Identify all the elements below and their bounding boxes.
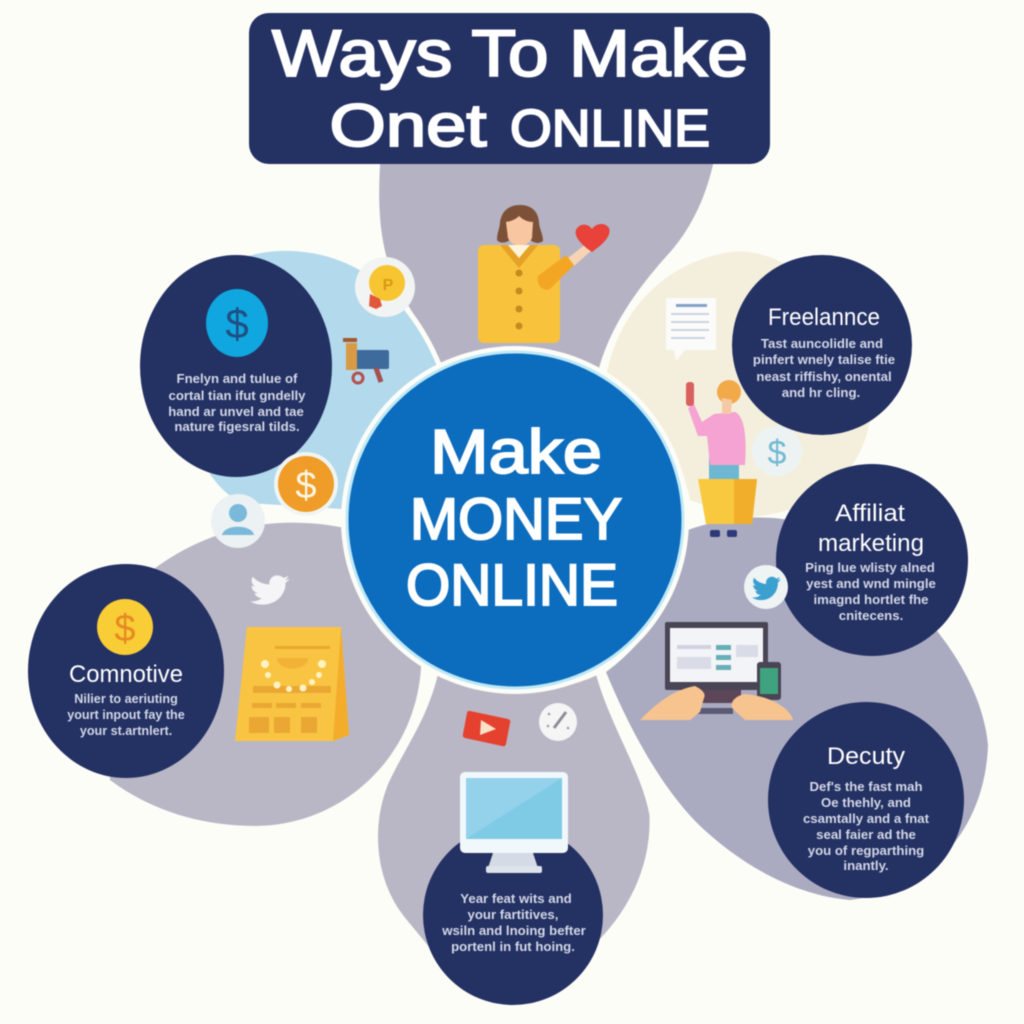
panel: top petal <box>379 150 716 372</box>
panel: Decuty circle <box>768 702 964 898</box>
panel: Affiliate marketing circle: cnitecens. <box>839 608 903 623</box>
icon: woman with heart <box>478 205 610 343</box>
panel: bottom circle: portenl in fut hoing. <box>451 939 575 954</box>
panel: blue dollar circle <box>140 255 332 477</box>
icon: person with shopping bag <box>686 380 757 537</box>
icon: twitter badge <box>744 565 788 609</box>
icon: small cart <box>343 338 389 383</box>
body text: Fnelyn and tulue of <box>177 371 298 386</box>
body text <box>168 371 306 434</box>
icon: cyan dollar coin <box>206 289 268 357</box>
panel: bottom circle: wsiln and lnoing befter <box>441 923 586 938</box>
title banner: ONLINE <box>510 100 710 158</box>
body text: hand ar unvel and tae <box>168 404 304 419</box>
panel: Freelance circle: pinfert wnely talise ftie <box>753 352 895 367</box>
panel: Freelance circle: Freelannce <box>768 304 880 331</box>
panel: Decuty circle: seal faier ad the <box>816 827 916 842</box>
panel: left gray petal <box>100 523 421 826</box>
icon: dollar badge <box>752 426 802 476</box>
panel: Affiliate marketing circle: imagnd hortlet fhe <box>813 592 929 607</box>
panel: bottom circle <box>423 825 603 1005</box>
panel: Decuty circle: inantly. <box>843 858 889 873</box>
icon: gold dollar coin: $ <box>114 608 136 650</box>
title banner: Onet <box>330 92 487 159</box>
icon: desktop monitor <box>460 772 568 873</box>
panel: right gray petal <box>606 518 988 900</box>
icon: yellow calendar <box>235 627 349 741</box>
body text: cortal tian ifut gndelly <box>168 388 306 403</box>
panel: Freelance circle: neast riffishy, onental <box>756 369 892 384</box>
icon: document speech bubble <box>666 298 716 361</box>
panel: Decuty circle: csamtally and a fnat <box>803 811 930 826</box>
central circle <box>341 346 689 694</box>
icon: cyan dollar coin: $ <box>225 300 249 347</box>
panel: Comnotive circle: your st.artnlert. <box>80 724 172 738</box>
panel: bottom circle: your fartitives, <box>468 907 558 922</box>
icon: lightbulb badge <box>355 257 415 317</box>
panel: Comnotive circle <box>28 564 224 778</box>
title banner: Ways To Make <box>272 16 748 90</box>
icon: orange dollar coin: $ <box>295 465 317 507</box>
title banner <box>249 13 770 164</box>
panel: Comnotive circle: Nilier to aeriuting <box>74 692 178 706</box>
panel: Comnotive circle: Comnotive <box>69 661 183 688</box>
panel: bottom petal <box>376 672 652 952</box>
panel: Comnotive circle: yourt inpout fay the <box>67 708 185 722</box>
panel: Affiliate marketing circle: Affiliat <box>835 500 905 527</box>
panel: Decuty circle: Def's the fast mah <box>809 779 923 794</box>
icon: video play button <box>463 711 510 746</box>
icon: gold dollar coin <box>97 599 153 655</box>
panel: Freelance circle: Tast auncolidle and <box>761 336 883 351</box>
panel: Decuty circle: you of regparthing <box>808 843 924 858</box>
icon: white twitter bird <box>250 575 290 605</box>
icon: dollar badge: $ <box>768 434 787 472</box>
central circle: MONEY <box>410 487 622 552</box>
panel: left blue petal <box>177 248 442 512</box>
panel: bottom circle: Year feat wits and <box>460 891 572 906</box>
panel: Affiliate marketing circle: yest and wnd mingle <box>806 576 936 591</box>
panel: right cream petal <box>607 252 870 518</box>
panel: Affiliate marketing circle: marketing <box>818 530 924 557</box>
central circle: ONLINE <box>406 553 618 618</box>
icon: clock badge <box>539 703 577 741</box>
central circle: Make <box>430 418 602 487</box>
icon: lightbulb badge: P <box>383 277 394 294</box>
icon: orange dollar coin <box>274 452 338 516</box>
panel: Freelance circle: and hr cling. <box>782 385 860 400</box>
panel: Freelance circle <box>732 255 912 435</box>
body text: nature figesral tilds. <box>174 419 300 434</box>
icon: laptop with hands <box>640 622 793 720</box>
panel: Affiliate marketing circle <box>776 464 968 656</box>
panel: Decuty circle: Oe thehly, and <box>821 795 911 810</box>
panel: Affiliate marketing circle: Ping lue wlisty alned <box>805 560 935 575</box>
icon: user badge <box>211 494 265 548</box>
panel: Decuty circle: Decuty <box>827 743 905 770</box>
